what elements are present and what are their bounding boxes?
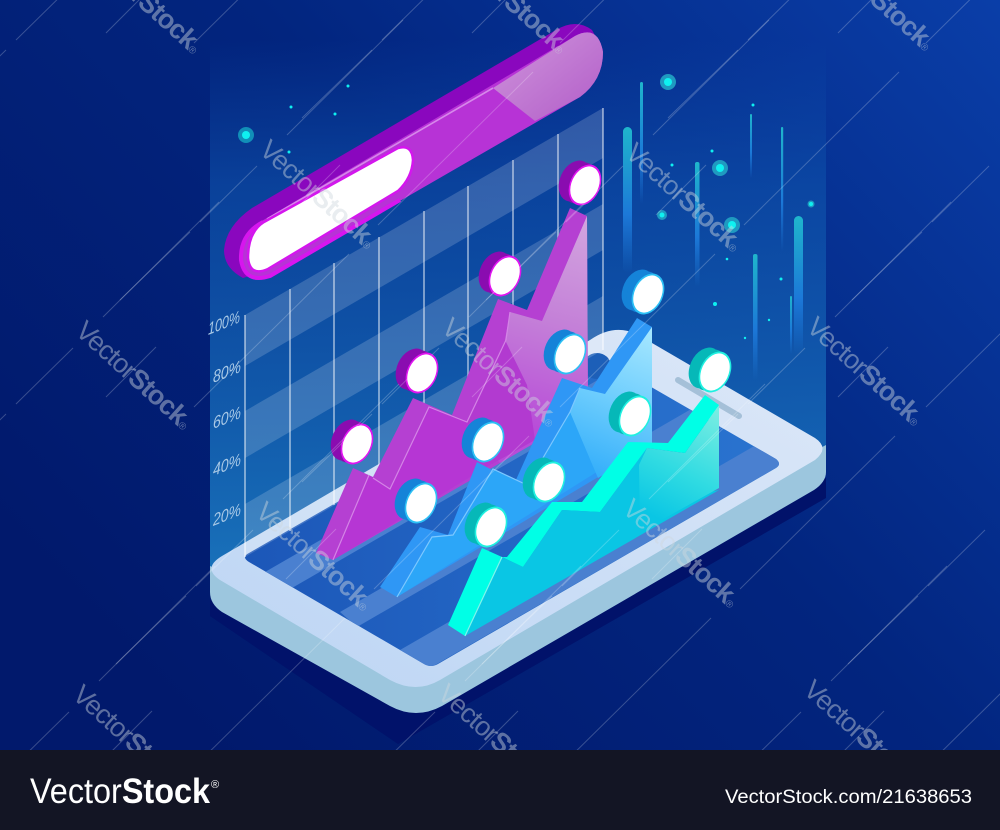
blue coin 4 [615, 264, 671, 320]
purple coin 2 [389, 343, 445, 399]
cyan coin 2 [516, 452, 572, 508]
speaker slot [678, 380, 739, 416]
glowing particles [238, 74, 814, 339]
purple silhouette [316, 208, 588, 560]
hologram light column [210, 40, 826, 700]
cyan fold lines [465, 557, 502, 636]
cyan coin 1 [458, 497, 514, 553]
axis labels: 20% [212, 499, 241, 530]
blue coin 1 [388, 473, 444, 529]
chart grid with bands [245, 108, 603, 557]
chart: purple series [316, 155, 608, 560]
footer logo: VectorStock [30, 772, 210, 811]
footer bar [0, 750, 1000, 830]
purple lower face [333, 340, 520, 560]
watermarks: VectorStock® [436, 312, 565, 433]
purple coin 1 [324, 414, 380, 470]
phone screen [245, 354, 779, 666]
panel: smartphone [210, 325, 826, 713]
watermarks: VectorStock [67, 679, 192, 796]
axis labels [208, 307, 241, 530]
watermarks: VectorStock [432, 678, 557, 795]
banner highlight [493, 32, 603, 121]
purple fold lines [333, 312, 510, 560]
home notch [583, 353, 611, 379]
axis labels: 40% [213, 449, 241, 480]
watermarks: VectorStock® [620, 137, 749, 258]
phone shadow [210, 478, 826, 744]
watermarks: VectorStock® [254, 134, 383, 255]
watermarks: VectorStock® [801, 311, 930, 432]
watermarks: VectorStock [798, 674, 923, 791]
blue coin 2 [455, 412, 511, 468]
blue silhouette [380, 318, 652, 597]
blue fold lines [397, 388, 580, 597]
purple coin 4 [552, 155, 608, 211]
watermarks: VectorStock® [250, 496, 379, 617]
cyan ribbon [448, 395, 719, 636]
chart: blue series [380, 264, 671, 597]
cyan coin 4 [682, 342, 738, 398]
cyan coin 3 [602, 386, 658, 442]
axis labels: 60% [213, 402, 241, 433]
banner white pill [248, 147, 413, 271]
banner depth [224, 24, 603, 278]
banner rim [241, 200, 400, 278]
footer image id: VectorStock.com/21638653 [725, 787, 972, 808]
title banner [224, 24, 603, 280]
phone side [210, 445, 826, 713]
blue coin 3 [537, 324, 593, 380]
chart: cyan series [448, 342, 738, 636]
axis labels: 100% [208, 307, 240, 339]
purple shading [467, 340, 535, 464]
purple coin 3 [472, 246, 528, 302]
blue pale face [570, 327, 652, 478]
phone top face [211, 330, 822, 687]
watermarks: VectorStock® [70, 315, 199, 436]
screen reflection bands [266, 380, 779, 666]
cyan pale face [639, 405, 719, 532]
footer registered mark: ® [211, 779, 219, 791]
watermarks: VectorStock® [617, 493, 746, 614]
light streaks [623, 82, 803, 380]
blue lower face [397, 412, 600, 597]
banner top rim line [267, 88, 493, 219]
cyan lower face [465, 448, 719, 636]
purple pale face [467, 216, 588, 463]
banner face [240, 32, 603, 280]
axis labels: 80% [213, 356, 241, 387]
